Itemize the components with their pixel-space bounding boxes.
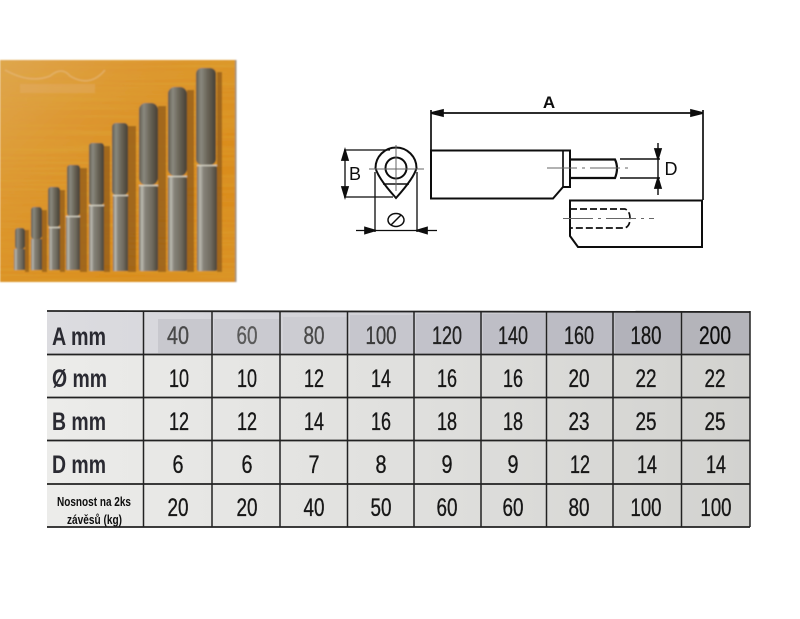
hinge socket section [563,200,702,247]
table shading [47,312,750,527]
row: load capacity values: 40 [304,494,324,522]
row labels: Ø mm [52,365,107,393]
row: D mm values: 12 [570,451,590,479]
row: A mm values: 80 [304,322,324,350]
row: load capacity values: 20 [236,494,258,522]
row: diameter values: 16 [437,365,457,393]
hinge pin side view [431,150,630,198]
row: B mm values: 14 [304,408,324,436]
row: D mm values [172,451,726,479]
row: load capacity values: 100 [630,494,662,522]
row: A mm values: 160 [564,322,594,350]
row: diameter values: 22 [636,365,656,393]
dimension A [431,93,703,200]
row: diameter values [169,365,726,393]
row: B mm values [169,408,726,436]
row: B mm values: 12 [237,408,257,436]
hinge rods [14,68,222,272]
row labels: A mm [52,323,106,351]
dimension D: D [664,159,678,179]
row: A mm values: 200 [699,322,731,350]
load capacity label: závěsů (kg) [67,512,122,527]
row: diameter values: 16 [503,365,523,393]
row: B mm values: 12 [169,408,189,436]
technical drawing [342,93,703,247]
row: load capacity values: 80 [568,494,590,522]
row: load capacity values: 100 [700,494,732,522]
row: B mm values: 23 [568,408,590,436]
row labels: D mm [52,451,106,479]
row: A mm values: 100 [366,322,396,350]
row: diameter values: 14 [371,365,391,393]
dimension D [620,143,678,195]
row: diameter values: 20 [568,365,590,393]
row: A mm values: 140 [498,322,528,350]
load capacity label [57,494,131,527]
row: D mm values: 14 [637,451,657,479]
row: A mm values: 180 [630,322,662,350]
row: diameter values: 12 [304,365,324,393]
front view with dimensions B and diameter [342,145,437,234]
table grid [47,311,750,527]
row: load capacity values: 20 [168,494,188,522]
row: A mm values: 40 [167,322,189,350]
dimension table [47,311,750,527]
row: D mm values: 8 [376,451,386,479]
row: B mm values: 18 [437,408,457,436]
row: A mm values: 120 [432,322,462,350]
row: D mm values: 9 [508,451,518,479]
row: B mm values: 18 [503,408,523,436]
row: diameter values: 10 [169,365,189,393]
row labels: B mm [52,408,106,436]
load capacity label: Nosnost na 2ks [57,494,131,509]
row: B mm values: 25 [704,408,726,436]
row: load capacity values [168,494,732,522]
row: load capacity values: 60 [502,494,524,522]
row: D mm values: 14 [706,451,726,479]
row: load capacity values: 60 [436,494,458,522]
row: D mm values: 7 [308,451,320,479]
row: diameter values: 10 [237,365,257,393]
row: A mm values: 60 [236,322,258,350]
row: B mm values: 16 [371,408,391,436]
row labels [52,323,107,479]
row: D mm values: 9 [442,451,452,479]
dimension A: A [543,93,555,112]
row: load capacity values: 50 [370,494,392,522]
row: D mm values: 6 [242,451,252,479]
diameter symbol [388,214,404,226]
front view with dimensions B and diameter: B [349,164,361,184]
row: B mm values: 25 [636,408,656,436]
row: A mm values [167,322,731,350]
photo: nine steel weld-on hinges on wood [0,60,236,282]
row: D mm values: 6 [172,451,184,479]
row: diameter values: 22 [704,365,726,393]
